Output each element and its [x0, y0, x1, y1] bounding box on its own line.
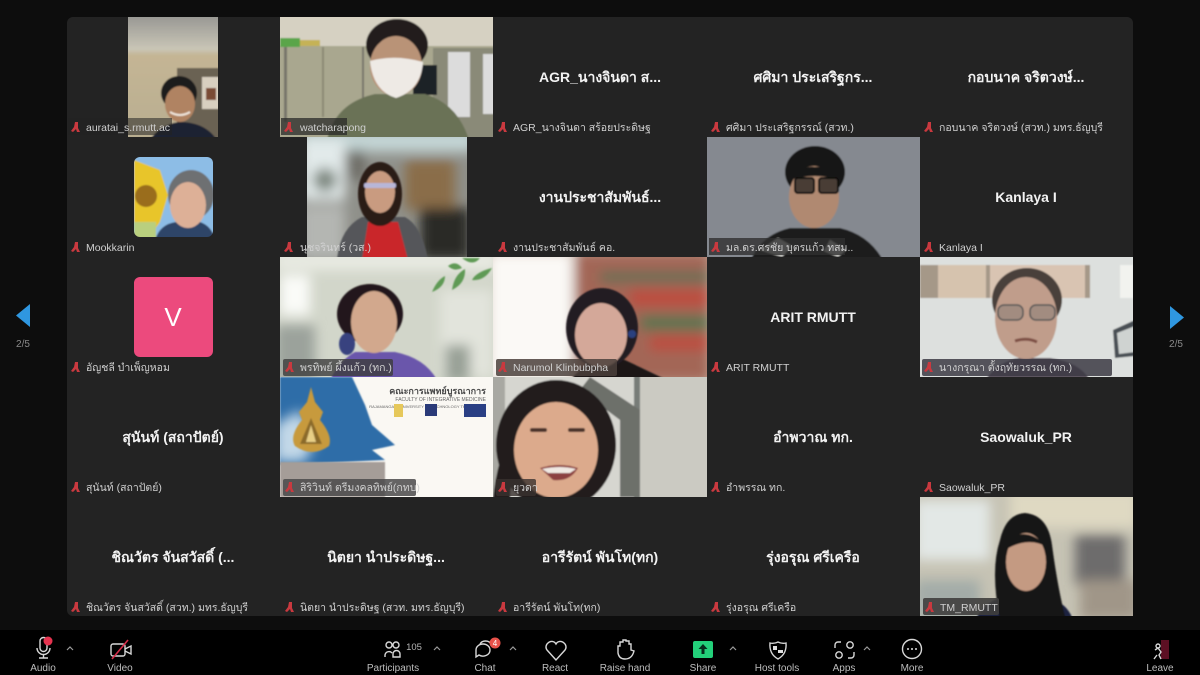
- tile: Kobnak name only: กอบนาค จริตวงษ์...: [968, 69, 1084, 85]
- name label: [923, 598, 999, 615]
- tile: Kanlaya name only: [924, 189, 1057, 254]
- tile: Saowaluk name only: [924, 429, 1072, 494]
- tile: Porntip video: [280, 257, 493, 377]
- tile: Sunan name only: [71, 429, 224, 494]
- tile: Amphawan name only: อำพรรณ ทก.: [726, 482, 785, 494]
- tile: TM_RMUTT video: [920, 497, 1133, 616]
- tile: Rungarun name only: รุ่งอรุณ ศรีเครือ: [726, 601, 796, 614]
- share button: Share: [690, 663, 717, 674]
- name label: พรทิพย์ ผึ้งแก้ว (ทก.): [300, 360, 392, 374]
- tile: Nittaya name only: [285, 549, 465, 614]
- tile: Narumol video: [493, 257, 707, 377]
- name label: [283, 359, 393, 376]
- tile: Rungarun name only: [711, 549, 860, 614]
- leave button: [1146, 640, 1174, 674]
- name label: auratai_s.rmutt.ac: [86, 122, 170, 134]
- tile: Saowaluk name only: Saowaluk_PR: [980, 429, 1072, 445]
- tile: Chinnawat name only: [71, 546, 248, 614]
- name label: Mookkarin: [86, 242, 135, 254]
- raise hand button: [600, 640, 650, 674]
- tile: Nutjarin video: [284, 137, 467, 257]
- name label: [283, 479, 420, 496]
- name label: นางกรุณา ตั้งฤทัยวรรณ (ทก.): [939, 360, 1072, 374]
- faculty heading: [369, 385, 487, 409]
- participants button: Participants: [367, 663, 419, 674]
- tile: Karuna video: [920, 257, 1133, 377]
- tile: watcharapong video: [280, 17, 493, 137]
- toolbar: [0, 630, 1200, 675]
- faculty heading: RAJAMANGALA UNIVERSITY OF TECHNOLOGY THANYABURI: [369, 404, 486, 409]
- more button: More: [901, 663, 924, 674]
- apps button: [833, 642, 870, 674]
- faculty heading: FACULTY OF INTEGRATIVE MEDICINE: [395, 397, 487, 403]
- tile: Nittaya name only: นิตยา นำประดิษฐ...: [327, 549, 445, 567]
- tile: ARIT name only: ARIT RMUTT: [726, 362, 790, 374]
- name label: TM_RMUTT: [940, 602, 998, 614]
- tile: Sunan name only: สุนันท์ (สถาปัตย์): [122, 429, 224, 446]
- tile: Rungarun name only: รุ่งอรุณ ศรีเครือ: [766, 549, 860, 566]
- name label: นุชจรินทร์ (วส.): [300, 241, 371, 254]
- tile: public relations name only: [498, 189, 661, 254]
- name label: Narumol Klinbubpha: [513, 362, 608, 374]
- raise hand button: Raise hand: [600, 663, 650, 674]
- tile: Saowaluk name only: Saowaluk_PR: [939, 482, 1005, 494]
- react button: React: [542, 663, 568, 674]
- faculty heading: คณะการแพทย์บูรณาการ: [389, 385, 486, 397]
- name label: อัญชลี บำเพ็ญหอม: [86, 360, 170, 374]
- host tools button: Host tools: [755, 663, 799, 674]
- tile: Amphawan name only: [711, 429, 853, 494]
- tile: V avatar: V: [164, 302, 182, 332]
- gallery panel: [67, 17, 1133, 616]
- arrow: next page: 2/5: [1169, 339, 1183, 350]
- name label: [496, 359, 617, 376]
- tile: Mookkarin avatar: [71, 153, 218, 254]
- participants button: [367, 642, 440, 674]
- tile: public relations name only: งานประชาสัมพันธ์...: [539, 189, 661, 205]
- react button: [542, 641, 568, 674]
- more button: [901, 640, 924, 674]
- tile: Kobnak name only: กอบนาค จริตวงษ์ (สวท.) มทร.ธัญบุรี: [939, 121, 1103, 134]
- name label: [496, 479, 538, 496]
- tile: Kanlaya name only: Kanlaya I: [939, 242, 983, 254]
- tile: Sunan name only: สุนันท์ (สถาปัตย์): [86, 481, 162, 494]
- host tools button: [755, 642, 799, 674]
- tile: Chinnawat name only: ชิณวัตร จันสวัสดิ์ (สวท.) มทร.ธัญบุรี: [86, 599, 248, 614]
- avatar square: [134, 277, 213, 357]
- tile: Sasima name only: [711, 69, 872, 134]
- tile: Faculty slide: [275, 377, 493, 497]
- audio button: Audio: [30, 663, 56, 674]
- tile: ARIT name only: [711, 309, 856, 374]
- tile: AGR name only: [498, 69, 661, 134]
- name label: watcharapong: [299, 122, 366, 134]
- name label: มล.ดร.ศรชัย บุตรแก้ว ทสม..: [726, 242, 853, 254]
- tile: Nittaya name only: นิตยา นำประดิษฐ (สวท. มทร.ธัญบุรี): [300, 601, 465, 614]
- audio button: [30, 636, 73, 674]
- video button: [107, 640, 133, 674]
- video button: Video: [107, 663, 133, 674]
- name label: [709, 238, 853, 255]
- tile: Areerat name only: [498, 548, 658, 614]
- tile: Sasima name only: ศศิมา ประเสริฐกรรณ์ (สวท.): [726, 121, 854, 134]
- tile: Yuwada video: [493, 377, 707, 497]
- tile: Chinnawat name only: ชิณวัตร จันสวัสดิ์ (...: [112, 546, 234, 565]
- tile: Kobnak name only: [924, 69, 1103, 134]
- tile: AGR name only: AGR_นางจินดา ส...: [539, 69, 661, 85]
- tile: Areerat name only: อารีรัตน์ พันโท(ทก): [513, 601, 600, 614]
- tile: Amphawan name only: อำพวาณ ทก.: [773, 429, 853, 445]
- participants button: 105: [406, 642, 422, 653]
- chat button: 4: [493, 639, 498, 648]
- arrow: next page: [1169, 306, 1184, 350]
- name label: [281, 118, 366, 135]
- tile: auratai video: [71, 17, 218, 137]
- tile: Kanlaya name only: Kanlaya I: [995, 189, 1057, 205]
- tile: Sornchai video: [707, 137, 920, 257]
- tile: public relations name only: งานประชาสัมพันธ์ คอ.: [513, 241, 615, 254]
- tile: V avatar: [71, 277, 213, 374]
- arrow: previous page: 2/5: [16, 339, 30, 350]
- name label: ยุวดา: [513, 482, 538, 494]
- share button: [690, 641, 736, 674]
- chat button: Chat: [474, 663, 496, 674]
- tile: Areerat name only: อารีรัตน์ พันโท(ทก): [542, 548, 658, 565]
- apps button: Apps: [833, 663, 855, 674]
- tile: ARIT name only: ARIT RMUTT: [770, 309, 856, 325]
- tile: AGR name only: AGR_นางจินดา สร้อยประดิษฐ: [513, 122, 651, 134]
- chat button: [474, 638, 516, 674]
- arrow: previous page: [16, 304, 30, 350]
- leave button: Leave: [1146, 663, 1174, 674]
- tile: Sasima name only: ศศิมา ประเสริฐกร...: [754, 69, 872, 87]
- name label: [68, 118, 172, 135]
- name label: สิริวินท์ ตรีมงคลทิพย์(กทบ): [300, 481, 420, 494]
- name label: [922, 359, 1112, 376]
